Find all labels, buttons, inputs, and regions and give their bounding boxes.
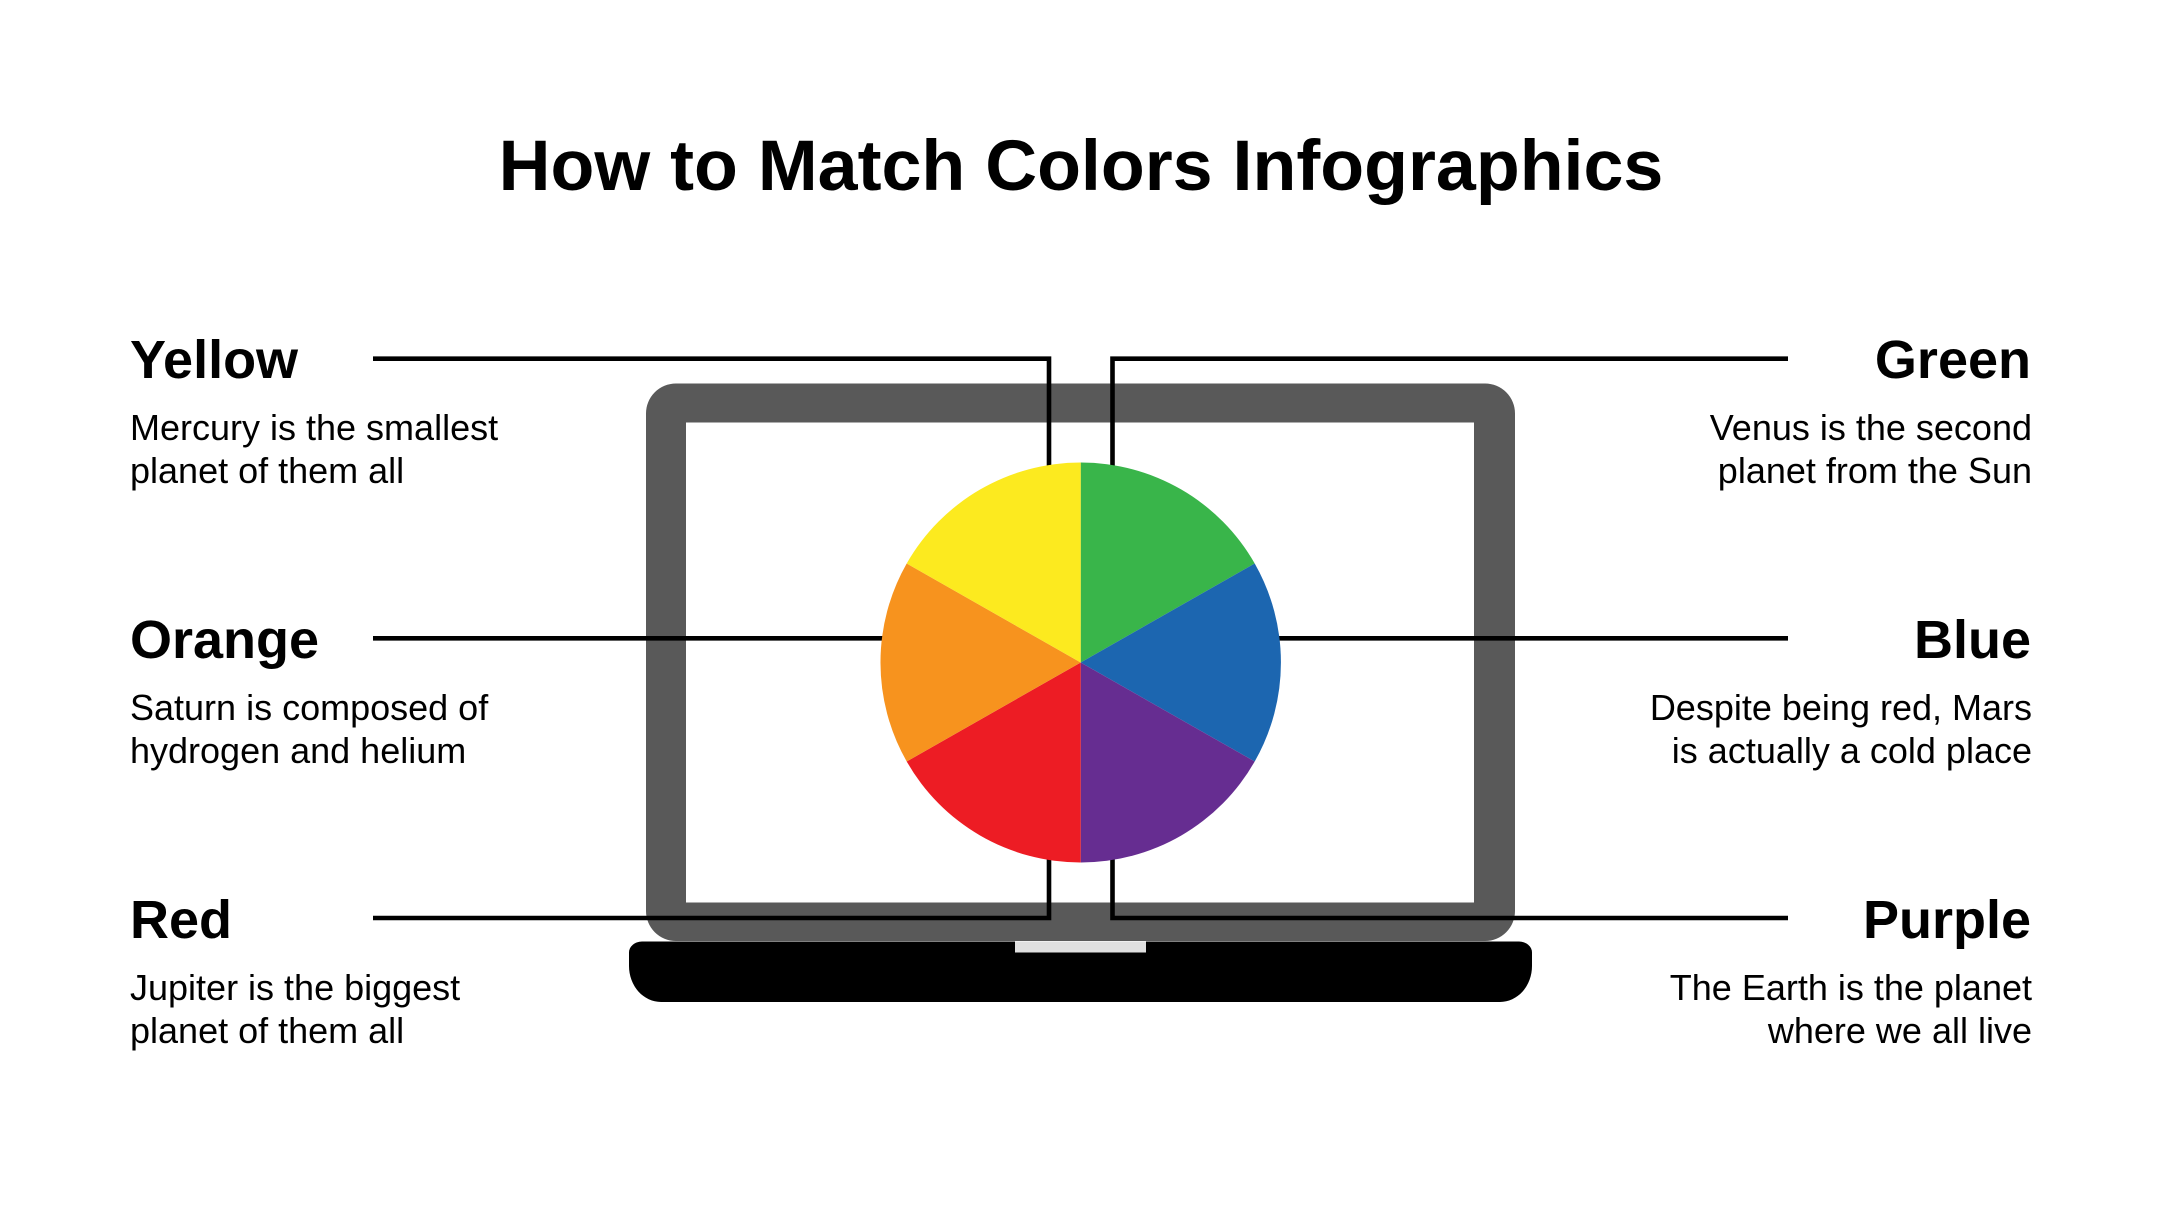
text block: orange <box>130 610 489 771</box>
wedge: orange <box>880 564 1081 762</box>
laptop illustration <box>629 384 1532 1002</box>
heading: orange: Orange <box>130 610 319 670</box>
heading: yellow: Yellow <box>130 330 299 390</box>
description: red: planet of them all <box>130 1010 404 1051</box>
connector: purple <box>1112 850 1788 918</box>
description: blue: Despite being red, Mars <box>1650 687 2032 728</box>
connector: orange <box>373 636 900 641</box>
wedge: yellow <box>907 462 1081 662</box>
connector: yellow <box>373 359 1049 480</box>
heading: blue: Blue <box>1914 610 2031 670</box>
laptop screen frame <box>646 384 1515 941</box>
text block: green <box>1710 330 2032 491</box>
description: green: planet from the Sun <box>1718 450 2032 491</box>
heading: green: Green <box>1875 330 2031 390</box>
text block: red <box>130 890 460 1051</box>
laptop base <box>629 942 1532 1002</box>
laptop notch <box>1015 942 1146 952</box>
connector: green <box>1112 359 1788 480</box>
wedge: blue <box>1081 564 1281 762</box>
title: How to Match Colors Infographics <box>499 126 1663 206</box>
description: purple: The Earth is the planet <box>1670 967 2032 1008</box>
heading: purple: Purple <box>1863 890 2031 950</box>
text block: purple <box>1670 890 2032 1051</box>
text block: yellow <box>130 330 498 491</box>
description: orange: hydrogen and helium <box>130 730 466 771</box>
description: yellow: Mercury is the smallest <box>130 407 498 448</box>
wedge: red <box>907 662 1081 863</box>
description: orange: Saturn is composed of <box>130 687 489 728</box>
wedge: green <box>1081 462 1255 662</box>
text block: blue <box>1650 610 2032 771</box>
connector: blue <box>1260 636 1788 641</box>
heading: red: Red <box>130 890 232 950</box>
color wheel <box>880 462 1281 863</box>
wedge: purple <box>1081 662 1255 863</box>
connector: red <box>373 850 1049 918</box>
description: green: Venus is the second <box>1710 407 2032 448</box>
description: blue: is actually a cold place <box>1672 730 2032 771</box>
description: purple: where we all live <box>1767 1010 2032 1051</box>
description: red: Jupiter is the biggest <box>130 967 460 1008</box>
connector lines <box>373 359 1788 918</box>
description: yellow: planet of them all <box>130 450 404 491</box>
